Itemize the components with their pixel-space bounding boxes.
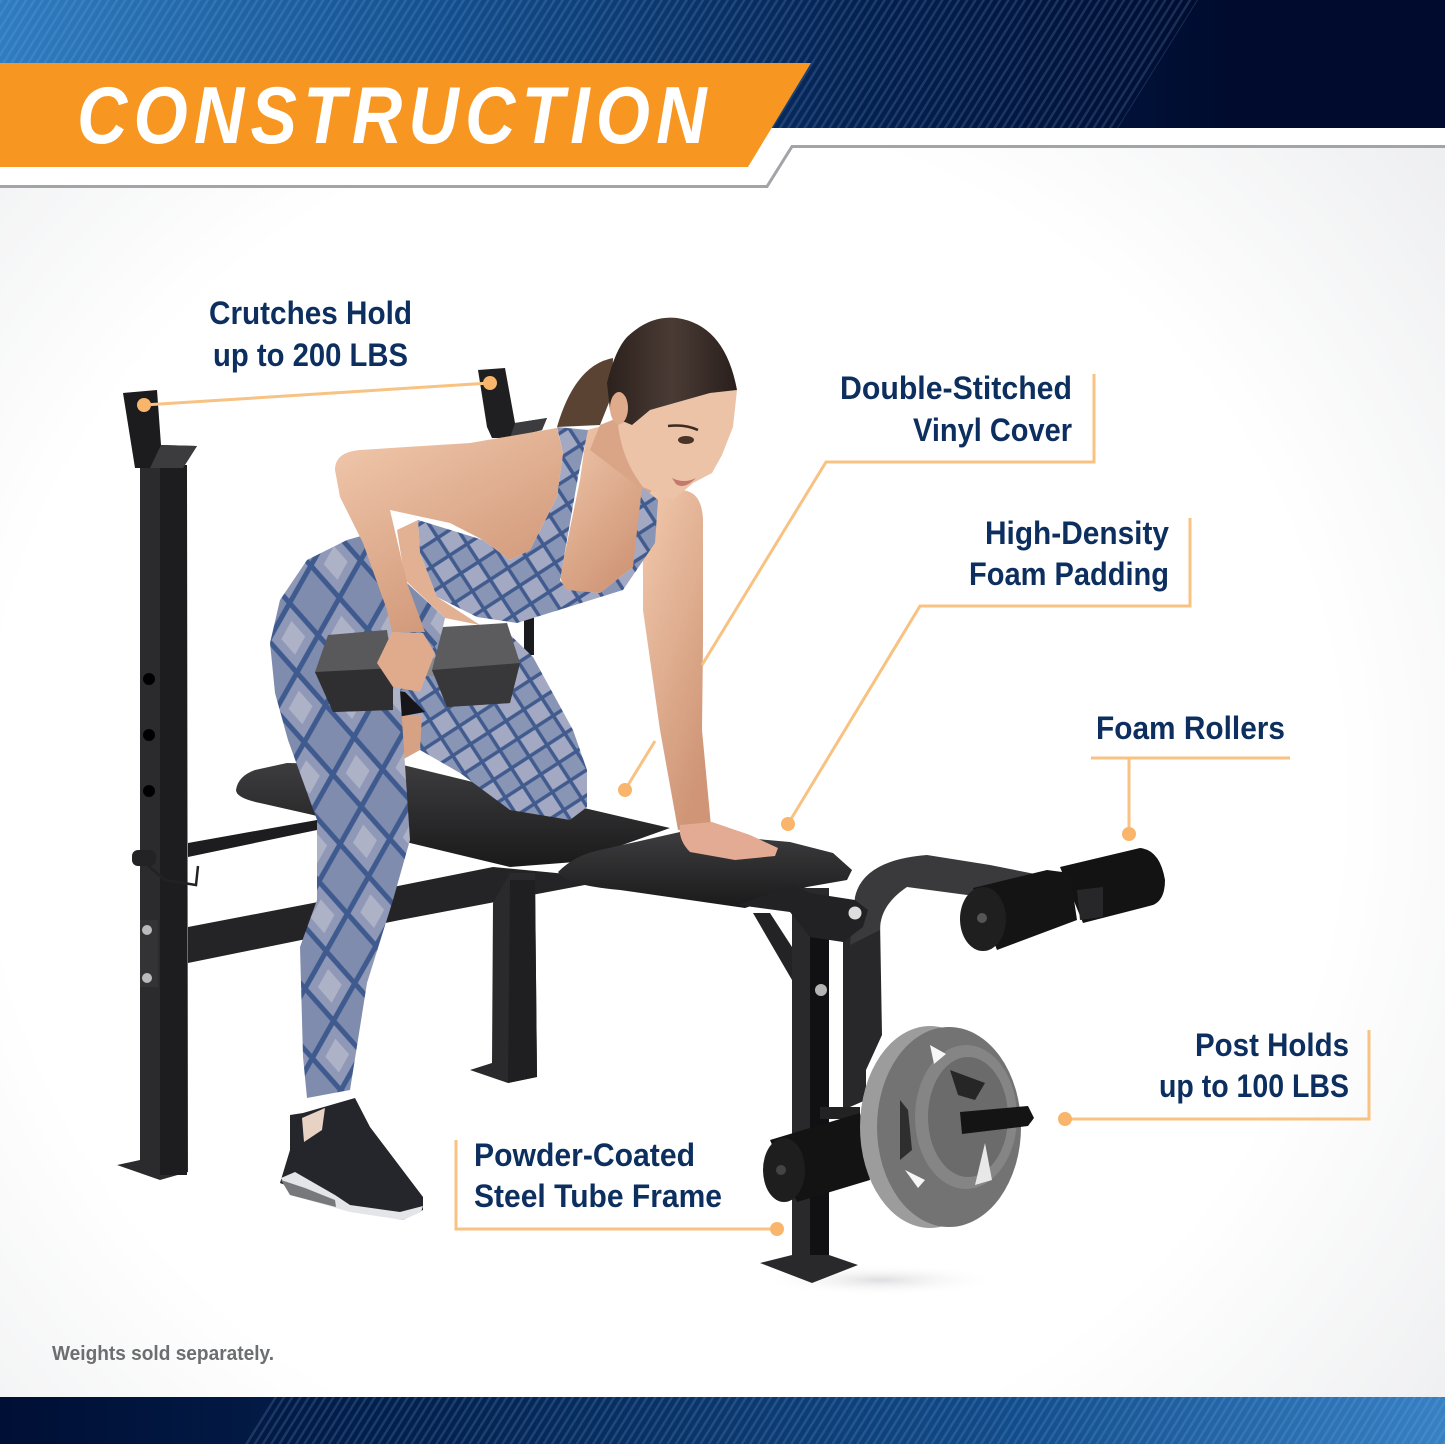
callout: foam rollers: Foam Rollers [1096, 710, 1285, 746]
bench pad left [236, 763, 670, 867]
leg arm [850, 855, 1040, 945]
floor shadows [760, 1264, 1000, 1296]
weight bench [117, 368, 1165, 1296]
shoe [280, 1098, 423, 1220]
ear [610, 392, 628, 424]
roller clip [1077, 887, 1103, 920]
callout: foam padding: High-Density [985, 515, 1169, 551]
bent leg [395, 625, 587, 820]
lower roller [763, 1113, 870, 1202]
bottom band [0, 1397, 1445, 1444]
rear leg [470, 873, 537, 1083]
callout: foam padding: Foam Padding [969, 556, 1169, 592]
callout: vinyl cover: Vinyl Cover [913, 412, 1072, 448]
sports bra [418, 427, 658, 623]
top banner [0, 0, 1445, 187]
rear upper roller [1060, 848, 1165, 923]
facial features [668, 426, 698, 486]
supporting arm [642, 490, 711, 830]
left crutch [123, 390, 197, 468]
standing leg and hip [270, 527, 445, 1098]
callout: post holds: Post Holds [1195, 1027, 1349, 1063]
waist skin [397, 520, 480, 625]
callout: post holds [1058, 1027, 1369, 1126]
weight plates [860, 1026, 1021, 1228]
neck [590, 415, 652, 490]
rowing arm [335, 428, 563, 632]
footnote: Weights sold separately. [52, 1343, 274, 1365]
knob and hook [139, 858, 198, 885]
callout: post holds: up to 100 LBS [1159, 1068, 1349, 1104]
callout: steel frame [456, 1137, 784, 1236]
chest skin [560, 420, 652, 593]
bench pad right [558, 832, 852, 908]
callout: vinyl cover [618, 370, 1094, 797]
ponytail [557, 358, 613, 427]
callout: steel frame: Powder-Coated [474, 1137, 695, 1173]
second post [843, 920, 882, 1110]
woman with dumbbell [270, 318, 778, 1220]
callout: vinyl cover: Double-Stitched [840, 370, 1072, 406]
weight post [960, 1106, 1034, 1134]
callout: steel frame: Steel Tube Frame [474, 1178, 722, 1214]
face [618, 390, 737, 500]
front upper roller [960, 870, 1077, 951]
wide crossbar [188, 867, 590, 963]
hair [607, 318, 737, 425]
left upright [117, 465, 188, 1180]
cross pipe [820, 1107, 860, 1119]
callout: crutches: Crutches Hold [209, 295, 412, 331]
gripping hand [377, 632, 435, 692]
callout: foam rollers [1091, 710, 1290, 841]
dumbbell [315, 623, 520, 712]
height bracket [140, 920, 158, 987]
rear crutch [478, 368, 547, 438]
title banner [0, 63, 811, 167]
hand on bench [680, 822, 778, 860]
ankle under knee [393, 715, 422, 760]
thin crossbar [188, 820, 317, 857]
front post [760, 888, 858, 1283]
title banner: CONSTRUCTION [77, 71, 708, 161]
front brace [753, 913, 792, 980]
pivot bracket [738, 885, 868, 942]
callout: foam padding [781, 515, 1190, 831]
callout: crutches: up to 200 LBS [213, 337, 408, 373]
callout: crutches [137, 295, 497, 412]
